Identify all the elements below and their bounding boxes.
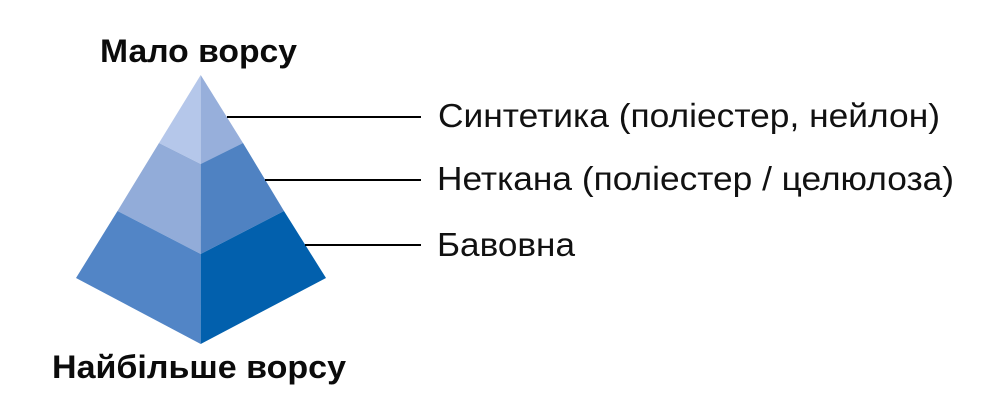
leader line: nonwoven [265, 179, 421, 181]
pyramid tier: top [159, 75, 243, 164]
heading: bottom label: Найбільше ворсу [52, 349, 346, 385]
leader line: cotton [305, 244, 421, 246]
pyramid chart [76, 75, 326, 344]
heading: top label: Мало ворсу [100, 33, 297, 69]
label: nonwoven: Неткана (поліестер / целюлоза) [437, 160, 954, 197]
label: cotton: Бавовна [437, 226, 576, 263]
leader line: synthetics [227, 116, 421, 118]
label: synthetics: Синтетика (поліестер, нейлон) [438, 97, 940, 134]
pyramid tier: middle [118, 143, 284, 254]
pyramid tier: bottom [76, 211, 326, 344]
